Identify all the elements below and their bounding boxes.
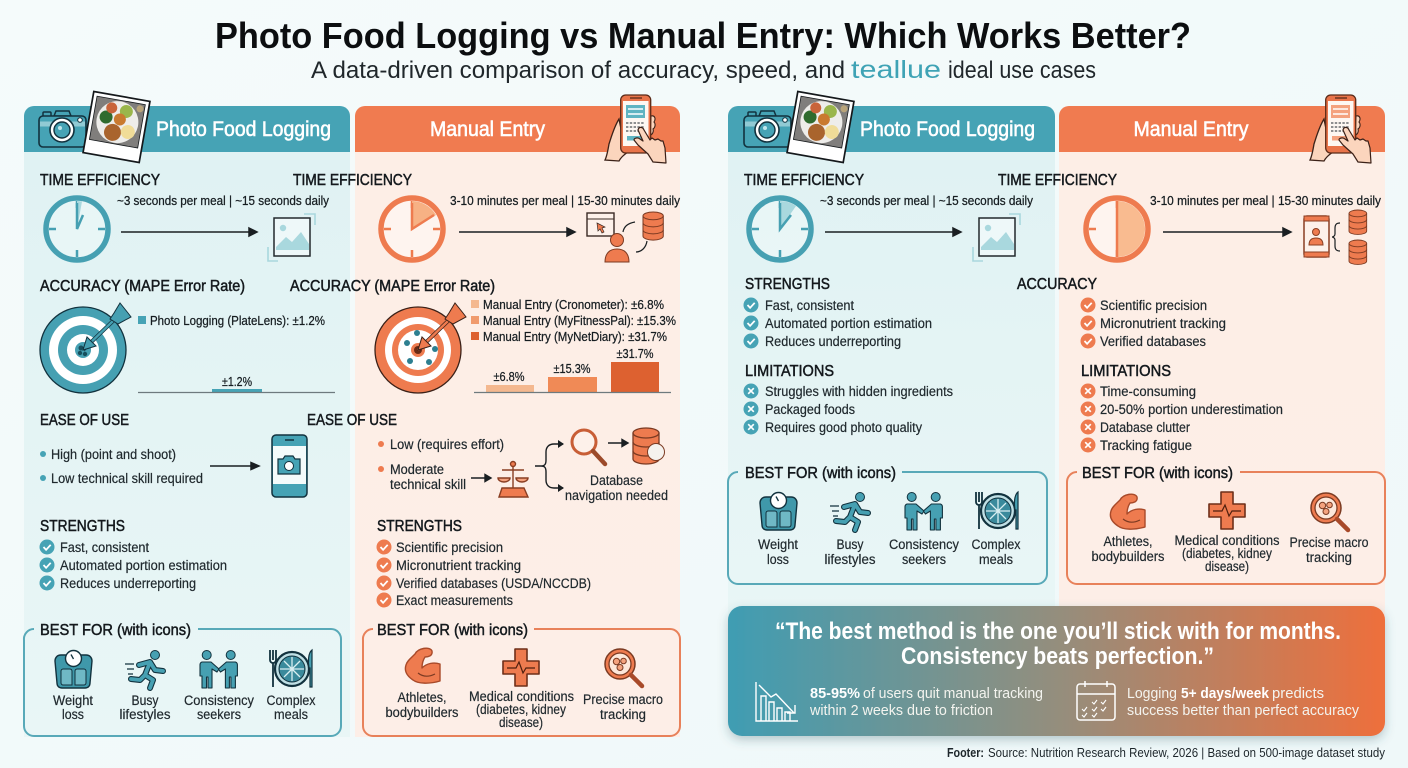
heading: accuracy: ACCURACY (MAPE Error Rate)	[290, 278, 495, 295]
item: consistency seekers: seekers	[902, 552, 946, 567]
legend: Photo Logging (PlateLens): ±1.2%	[150, 313, 325, 328]
header bar	[1059, 106, 1385, 152]
heading: time efficiency: TIME EFFICIENCY	[293, 172, 412, 189]
icon: clock	[749, 198, 811, 260]
item: medical conditions: (diabetes, kidney	[1182, 546, 1272, 561]
item: complex meals: Complex	[972, 537, 1021, 552]
header text: Manual Entry	[430, 118, 545, 141]
heading: ease of use: EASE OF USE	[307, 412, 397, 429]
header text: Manual Entry	[1134, 118, 1249, 141]
arrow	[210, 462, 259, 470]
stat: quitting: of users quit manual tracking	[863, 686, 1043, 702]
limitations list: 20-50% portion underestimation	[1100, 402, 1283, 417]
header bar	[24, 106, 350, 152]
item: complex meals: meals	[979, 552, 1013, 567]
header text: Photo Food Logging	[156, 118, 331, 141]
legend: Manual Entry (MyNetDiary): ±31.7%	[483, 329, 667, 344]
footer: Source: Nutrition Research Review, 2026 | Based on 500-image dataset study	[988, 746, 1386, 760]
stat: consistency: Logging	[1127, 686, 1177, 702]
limitations list: Database clutter	[1100, 420, 1190, 435]
accuracy list: Verified databases	[1100, 334, 1206, 349]
icon: phone in hand	[605, 95, 666, 163]
subtitle: A data-driven comparison of accuracy, speed, and	[311, 57, 845, 84]
icon: target	[375, 303, 466, 393]
item: complex meals	[266, 650, 316, 722]
item: weight loss	[758, 492, 798, 567]
panel: manual entry, right comparison	[998, 95, 1385, 620]
database caption: navigation needed	[565, 488, 668, 503]
item: precise macro	[1290, 493, 1368, 565]
legend: Manual Entry (Cronometer): ±6.8%	[483, 297, 664, 312]
heading: accuracy: ACCURACY	[1017, 276, 1097, 293]
arrow	[121, 228, 257, 236]
stat: consistency: success better than perfect accuracy	[1127, 703, 1360, 719]
item: weight loss	[53, 650, 93, 722]
time stat: ~3 seconds per meal | ~15 seconds daily	[117, 193, 329, 208]
item: medical conditions: disease)	[1205, 559, 1249, 574]
accuracy list	[1080, 298, 1226, 349]
icon: clock	[46, 198, 108, 260]
strengths list: Reduces underreporting	[60, 576, 196, 591]
limitations list: Requires good photo quality	[765, 420, 922, 435]
item: weight loss: Weight	[758, 537, 798, 552]
limitations list: Time-consuming	[1100, 384, 1196, 399]
strengths list: Scientific precision	[396, 540, 503, 555]
stat: quitting: within 2 weeks due to friction	[809, 703, 993, 719]
icon: image	[973, 214, 1020, 261]
item: precise macro: Precise macro	[583, 692, 663, 707]
icon: polaroid food photo	[787, 92, 854, 162]
strengths list: Automated portion estimation	[60, 558, 227, 573]
item: busy lifestyles: Busy	[836, 537, 864, 552]
heading: time efficiency: TIME EFFICIENCY	[998, 172, 1117, 189]
subtitle: ideal use cases	[948, 57, 1096, 84]
arrow	[459, 228, 575, 236]
item: medical conditions	[1174, 492, 1280, 574]
icon: phone in hand	[1310, 95, 1371, 163]
item: busy lifestyles	[824, 492, 876, 567]
arrow	[1163, 228, 1291, 236]
item: precise macro: tracking	[600, 707, 646, 722]
item: consistency seekers: Consistency	[184, 693, 254, 708]
header text: Photo Food Logging	[860, 118, 1035, 141]
ease list: Low (requires effort)	[390, 437, 504, 452]
heading: limitations: LIMITATIONS	[745, 363, 834, 380]
panel background	[1059, 150, 1385, 620]
callout: quote banner	[728, 606, 1385, 736]
panel: photo food logging, left comparison	[24, 92, 350, 737]
panel background	[728, 150, 1055, 620]
branching arrows	[535, 444, 563, 488]
bar chart	[474, 346, 671, 392]
strengths list: Fast, consistent	[765, 298, 854, 313]
item: athletes: bodybuilders	[1092, 549, 1165, 564]
icon: camera	[744, 111, 791, 147]
item: weight loss: loss	[62, 707, 84, 722]
icon: clock	[381, 198, 443, 260]
heading: best for: BEST FOR (with icons)	[40, 622, 191, 639]
item: complex meals: meals	[274, 707, 308, 722]
item: busy lifestyles: lifestyles	[824, 552, 876, 567]
heading: best for: BEST FOR (with icons)	[745, 465, 896, 482]
item: precise macro: Precise macro	[1290, 535, 1368, 550]
item: athletes: Athletes,	[398, 690, 446, 705]
item: medical conditions: disease)	[499, 715, 543, 730]
item: complex meals: Complex	[266, 693, 316, 708]
panel: manual entry, left comparison	[290, 95, 680, 737]
stat: quitting: 85-95%	[810, 686, 860, 702]
arrow	[825, 228, 961, 236]
strengths list	[376, 540, 591, 608]
ease list: Moderate	[390, 462, 444, 477]
heading: time efficiency: TIME EFFICIENCY	[40, 172, 160, 189]
arrow	[608, 440, 628, 446]
stat: consistency: 5+ days/week	[1181, 686, 1270, 702]
icon: camera	[39, 111, 86, 147]
best for box	[1067, 472, 1385, 584]
ease list	[40, 447, 203, 486]
panel background	[355, 150, 680, 737]
item: precise macro: tracking	[1306, 550, 1352, 565]
heading: ease of use: EASE OF USE	[40, 412, 129, 429]
icon: calendar	[1077, 681, 1115, 720]
database caption	[565, 473, 668, 503]
strengths list: Micronutrient tracking	[396, 558, 521, 573]
stat: consistency	[1127, 686, 1360, 719]
title: Photo Food Logging vs Manual Entry: Which Works Better?	[215, 15, 1191, 56]
icon: database	[633, 428, 664, 464]
branch arrow heads	[558, 440, 564, 492]
item: medical conditions: Medical conditions	[469, 689, 574, 704]
icon: target	[40, 303, 131, 393]
bar chart: ±1.2%	[222, 374, 252, 389]
limitations list: Struggles with hidden ingredients	[765, 384, 953, 399]
strengths list: Exact measurements	[396, 593, 513, 608]
heading: best for: BEST FOR (with icons)	[377, 622, 528, 639]
icon: polaroid food photo	[83, 92, 150, 162]
limitations list: Packaged foods	[765, 402, 855, 417]
ease list: High (point and shoot)	[51, 447, 176, 462]
ease list: Low technical skill required	[51, 471, 203, 486]
heading: strengths: STRENGTHS	[40, 518, 125, 535]
heading: accuracy: ACCURACY (MAPE Error Rate)	[40, 278, 245, 295]
icon: declining chart	[756, 682, 798, 721]
footer: Footer:	[947, 746, 984, 760]
icon: phone camera	[272, 435, 307, 497]
item: athletes: Athletes,	[1104, 534, 1152, 549]
heading: best for: BEST FOR (with icons)	[1082, 465, 1233, 482]
accuracy list: Micronutrient tracking	[1100, 316, 1226, 331]
bar chart: ±6.8%	[494, 369, 525, 384]
item: consistency seekers: seekers	[197, 707, 241, 722]
subtitle	[311, 56, 1096, 84]
heading: time efficiency: TIME EFFICIENCY	[744, 172, 864, 189]
time stat: ~3 seconds per meal | ~15 seconds daily	[820, 193, 1033, 208]
item: athletes: bodybuilders	[386, 705, 459, 720]
banner background	[728, 606, 1385, 736]
database caption: Database	[590, 473, 643, 488]
header bar	[355, 106, 680, 152]
header bar	[728, 106, 1055, 152]
bar chart: ±31.7%	[616, 346, 654, 361]
item: busy lifestyles: Busy	[132, 693, 159, 708]
heading: strengths: STRENGTHS	[745, 276, 830, 293]
subtitle: teallue	[851, 56, 941, 84]
time stat: 3-10 minutes per meal | 15-30 minutes daily	[450, 193, 680, 208]
item: medical conditions: (diabetes, kidney	[476, 702, 566, 717]
heading: strengths: STRENGTHS	[377, 518, 462, 535]
strengths list: Automated portion estimation	[765, 316, 932, 331]
item: athletes	[386, 648, 459, 720]
ease list: technical skill	[390, 477, 466, 492]
stat: quitting	[809, 686, 1043, 719]
strengths list: Verified databases (USDA/NCCDB)	[396, 576, 591, 591]
limitations list	[1080, 384, 1283, 453]
item: consistency seekers	[889, 492, 959, 567]
item: precise macro	[583, 649, 663, 722]
icon: browser user database	[587, 212, 663, 262]
time stat: 3-10 minutes per meal | 15-30 minutes daily	[1150, 193, 1381, 208]
heading: limitations: LIMITATIONS	[1081, 363, 1171, 380]
item: consistency seekers	[184, 650, 254, 722]
legend: Manual Entry (MyFitnessPal): ±15.3%	[483, 313, 676, 328]
arrow	[471, 474, 491, 482]
item: complex meals	[972, 492, 1021, 567]
strengths list	[744, 298, 932, 349]
item: weight loss: loss	[767, 552, 789, 567]
strengths list: Reduces underreporting	[765, 334, 901, 349]
ease list	[378, 437, 504, 492]
accuracy list: Scientific precision	[1100, 298, 1207, 313]
best for box	[24, 629, 341, 736]
item: consistency seekers: Consistency	[889, 537, 959, 552]
item: weight loss: Weight	[53, 693, 93, 708]
best for box	[363, 629, 680, 736]
limitations list	[744, 384, 953, 435]
stat: consistency: predicts	[1272, 686, 1324, 702]
panel background	[24, 150, 350, 737]
icon: clock	[1086, 198, 1148, 260]
quote text: Consistency beats perfection.”	[901, 643, 1214, 670]
panel: photo food logging, right comparison	[728, 92, 1055, 620]
item: medical conditions: Medical conditions	[1174, 533, 1280, 548]
item: busy lifestyles: lifestyles	[120, 707, 171, 722]
strengths list	[40, 540, 227, 591]
icon: magnifier	[572, 430, 605, 464]
bar chart: ±15.3%	[554, 361, 591, 376]
strengths list: Fast, consistent	[60, 540, 149, 555]
limitations list: Tracking fatigue	[1100, 438, 1192, 453]
item: medical conditions	[469, 649, 574, 730]
best for box	[728, 472, 1047, 584]
quote text	[775, 618, 1341, 670]
icon: balance scale	[498, 462, 528, 497]
icon: image	[268, 214, 315, 261]
item: busy lifestyles	[120, 650, 171, 722]
legend	[471, 297, 676, 344]
bar chart	[138, 374, 335, 392]
icon: phone and databases	[1304, 210, 1367, 264]
item: athletes	[1092, 494, 1165, 564]
